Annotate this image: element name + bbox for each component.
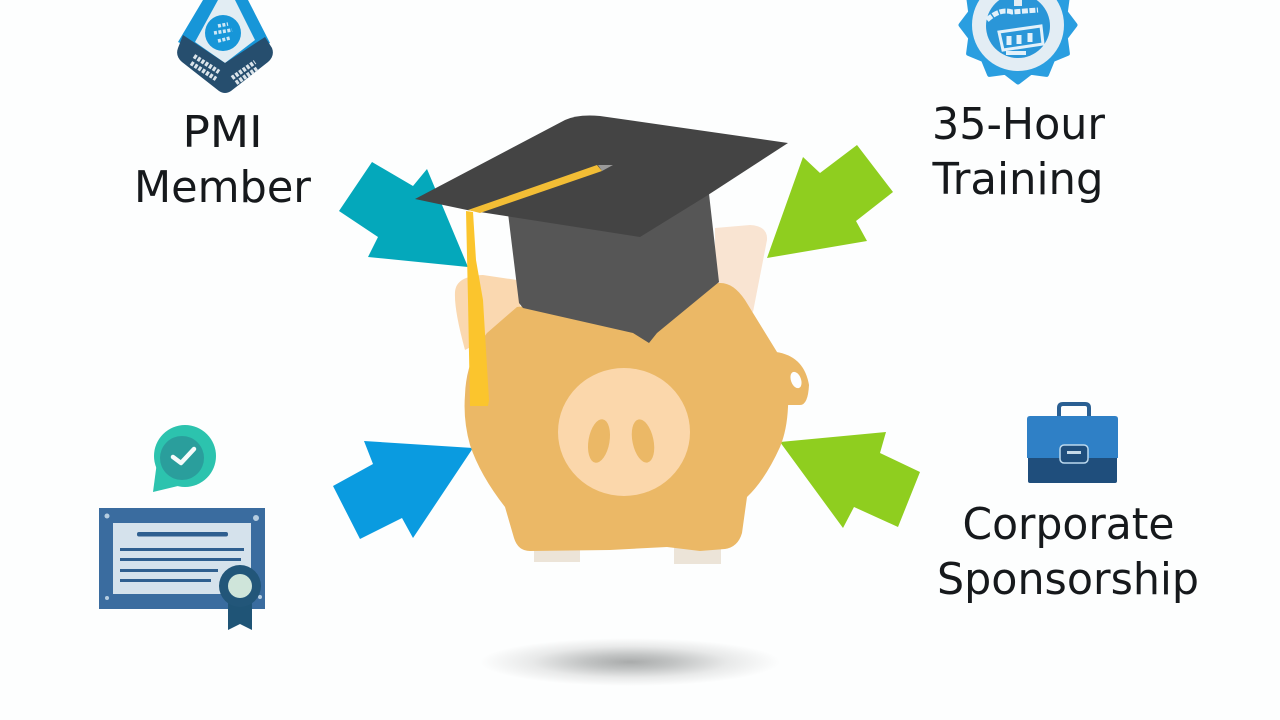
arrow: blue pointing to pig: [333, 441, 473, 539]
pig tail loop: [776, 352, 809, 405]
icon: PMI badge: [177, 0, 273, 93]
cap board: [415, 116, 788, 237]
icon: briefcase: [1027, 404, 1118, 483]
certificate corner dots: [104, 514, 262, 600]
label: Training: Training: [932, 155, 1104, 205]
block: certificate: [99, 425, 265, 630]
bubble outer: [154, 425, 216, 487]
seal inner disc: [986, 0, 1050, 58]
tassel cord: [468, 165, 602, 213]
briefcase clasp: [1060, 445, 1088, 463]
cap base: [507, 185, 719, 343]
arrow: green bottom right pointing to pig: [780, 432, 920, 528]
label: Corporate: Corporate: [962, 500, 1174, 550]
certificate ribbon: [228, 600, 252, 630]
briefcase lower body: [1028, 456, 1117, 483]
certificate rosette center: [228, 574, 252, 598]
ground shadow: [480, 638, 780, 686]
certificate text lines: [120, 532, 244, 582]
icon: check bubble: [153, 425, 216, 492]
briefcase clasp bar: [1067, 451, 1081, 454]
block: PMI Member: [134, 0, 311, 213]
label: 35-Hour: 35-Hour: [932, 100, 1105, 150]
label: PMI: PMI: [182, 108, 262, 158]
label: Sponsorship: Sponsorship: [937, 555, 1199, 605]
certificate paper: [113, 523, 251, 594]
pig left ear: [455, 275, 522, 350]
bubble inner: [160, 436, 204, 480]
pig feet: [534, 545, 721, 564]
pig snout: [558, 368, 690, 496]
arrow: teal pointing to pig: [339, 162, 468, 267]
certificate frame: [99, 508, 265, 609]
pig tail hole: [788, 370, 804, 390]
check mark: [173, 449, 194, 463]
seal building emblem: [987, 10, 1043, 53]
badge blue frame: [178, 0, 270, 65]
seal emblem bar: [1014, 0, 1022, 6]
block: Corporate Sponsorship: [937, 404, 1199, 605]
bubble tail: [153, 462, 178, 492]
pig right ear: [715, 225, 767, 312]
graduation cap: [415, 116, 788, 406]
pig body: [465, 283, 788, 551]
icon: certificate: [99, 508, 265, 630]
tassel hanging: [466, 211, 489, 406]
badge circle emblem: [214, 24, 232, 41]
badge light inner: [195, 0, 255, 63]
icon: training seal: [961, 0, 1075, 82]
seal scalloped edge: [961, 0, 1075, 82]
briefcase handle: [1059, 404, 1089, 416]
badge circle: [205, 15, 241, 51]
badge marks: [191, 56, 258, 83]
certificate rosette: [219, 565, 261, 607]
pig right nostril: [628, 417, 658, 465]
piggy bank: [455, 225, 809, 564]
label: Member: Member: [134, 163, 311, 213]
pig left nostril: [585, 418, 613, 464]
seal light ring: [972, 0, 1064, 71]
badge dark base: [177, 35, 273, 93]
arrow: green top right pointing to pig: [767, 145, 893, 258]
tassel cord tip: [598, 165, 613, 171]
briefcase upper body: [1027, 416, 1118, 458]
block: 35-Hour Training: [932, 0, 1105, 205]
